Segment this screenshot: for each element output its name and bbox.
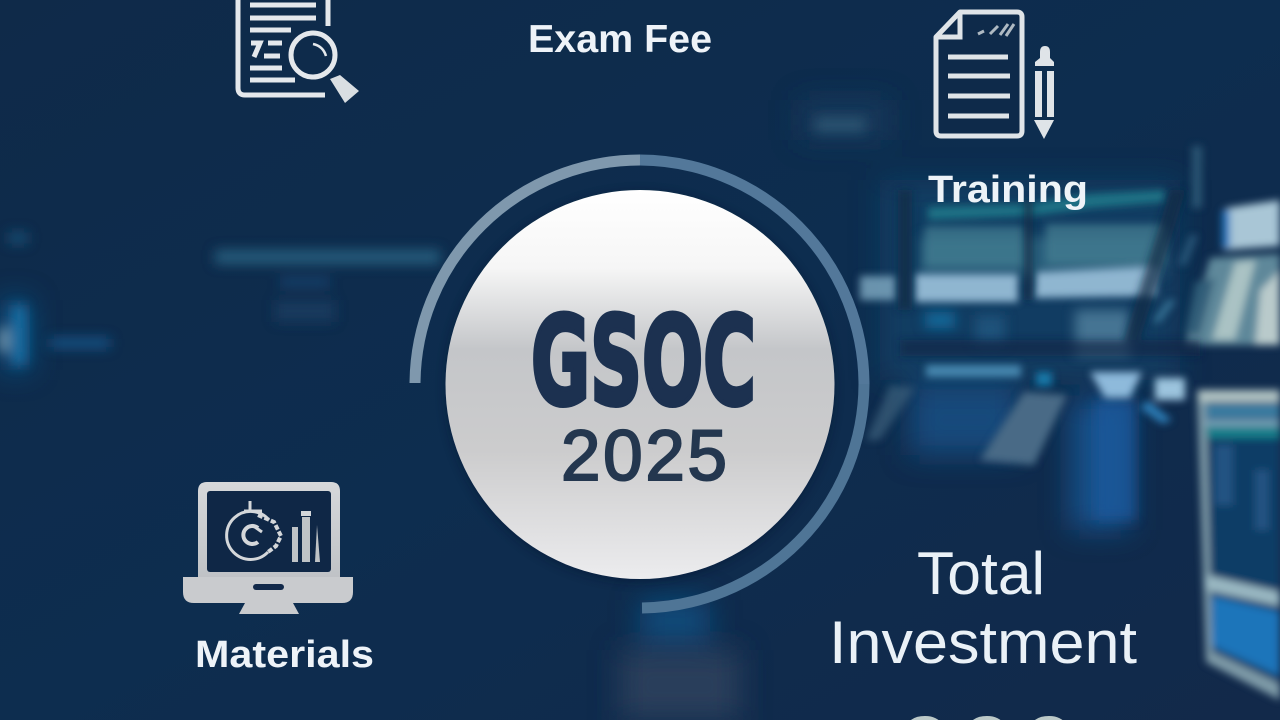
progress ring <box>415 160 864 608</box>
total investment heading: Investment <box>829 609 1137 676</box>
label: Exam Fee: Exam Fee <box>528 18 712 61</box>
badge title: GSOC <box>531 291 756 433</box>
badge year: 2025 <box>561 417 727 496</box>
label: Training: Training <box>928 169 1088 211</box>
icon: document with pencil <box>936 12 1054 139</box>
center badge <box>445 190 835 582</box>
icon: document with magnifier <box>238 0 359 103</box>
label: Materials: Materials <box>195 634 374 676</box>
total investment heading <box>829 540 1137 676</box>
total investment heading: Total <box>917 540 1045 607</box>
icon: laptop with gear and bars <box>183 482 353 614</box>
